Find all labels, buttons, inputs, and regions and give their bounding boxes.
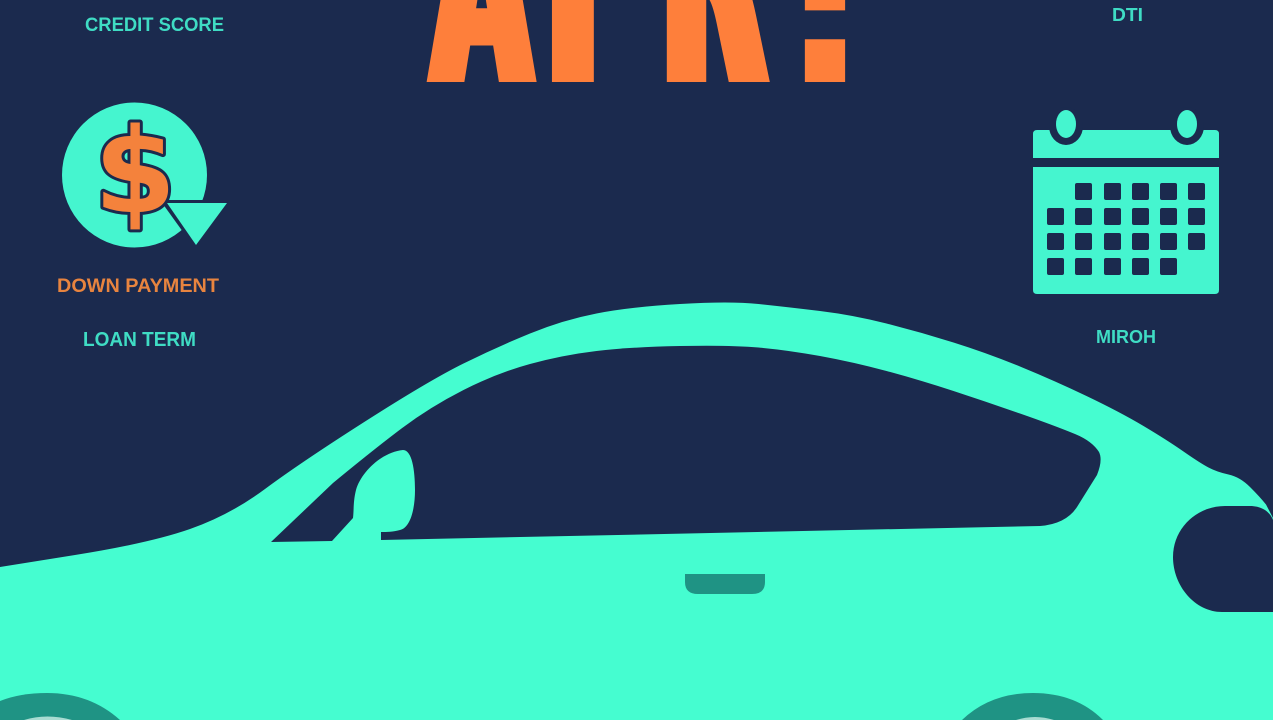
icon: dollar coin with down arrow — [62, 102, 230, 250]
side mirror — [332, 450, 415, 541]
front wheel — [0, 693, 120, 720]
icon: dollar coin with down arrow: $ — [94, 102, 176, 240]
rear wheel — [962, 693, 1103, 720]
label: loan term: LOAN TERM — [83, 329, 196, 351]
door handle — [685, 574, 765, 594]
label: down payment: DOWN PAYMENT — [57, 276, 219, 297]
car window — [271, 346, 1101, 542]
car illustration — [0, 302, 1273, 720]
title: APR: — [433, 0, 865, 162]
headlight — [1173, 506, 1273, 612]
right edge strip — [1273, 0, 1280, 720]
icon: calendar — [1033, 107, 1219, 294]
label: month: MIROH — [1096, 327, 1156, 347]
label: credit score: CREDIT SCORE — [85, 15, 224, 36]
label: DTI: DTI — [1112, 5, 1143, 25]
car body — [0, 302, 1273, 720]
